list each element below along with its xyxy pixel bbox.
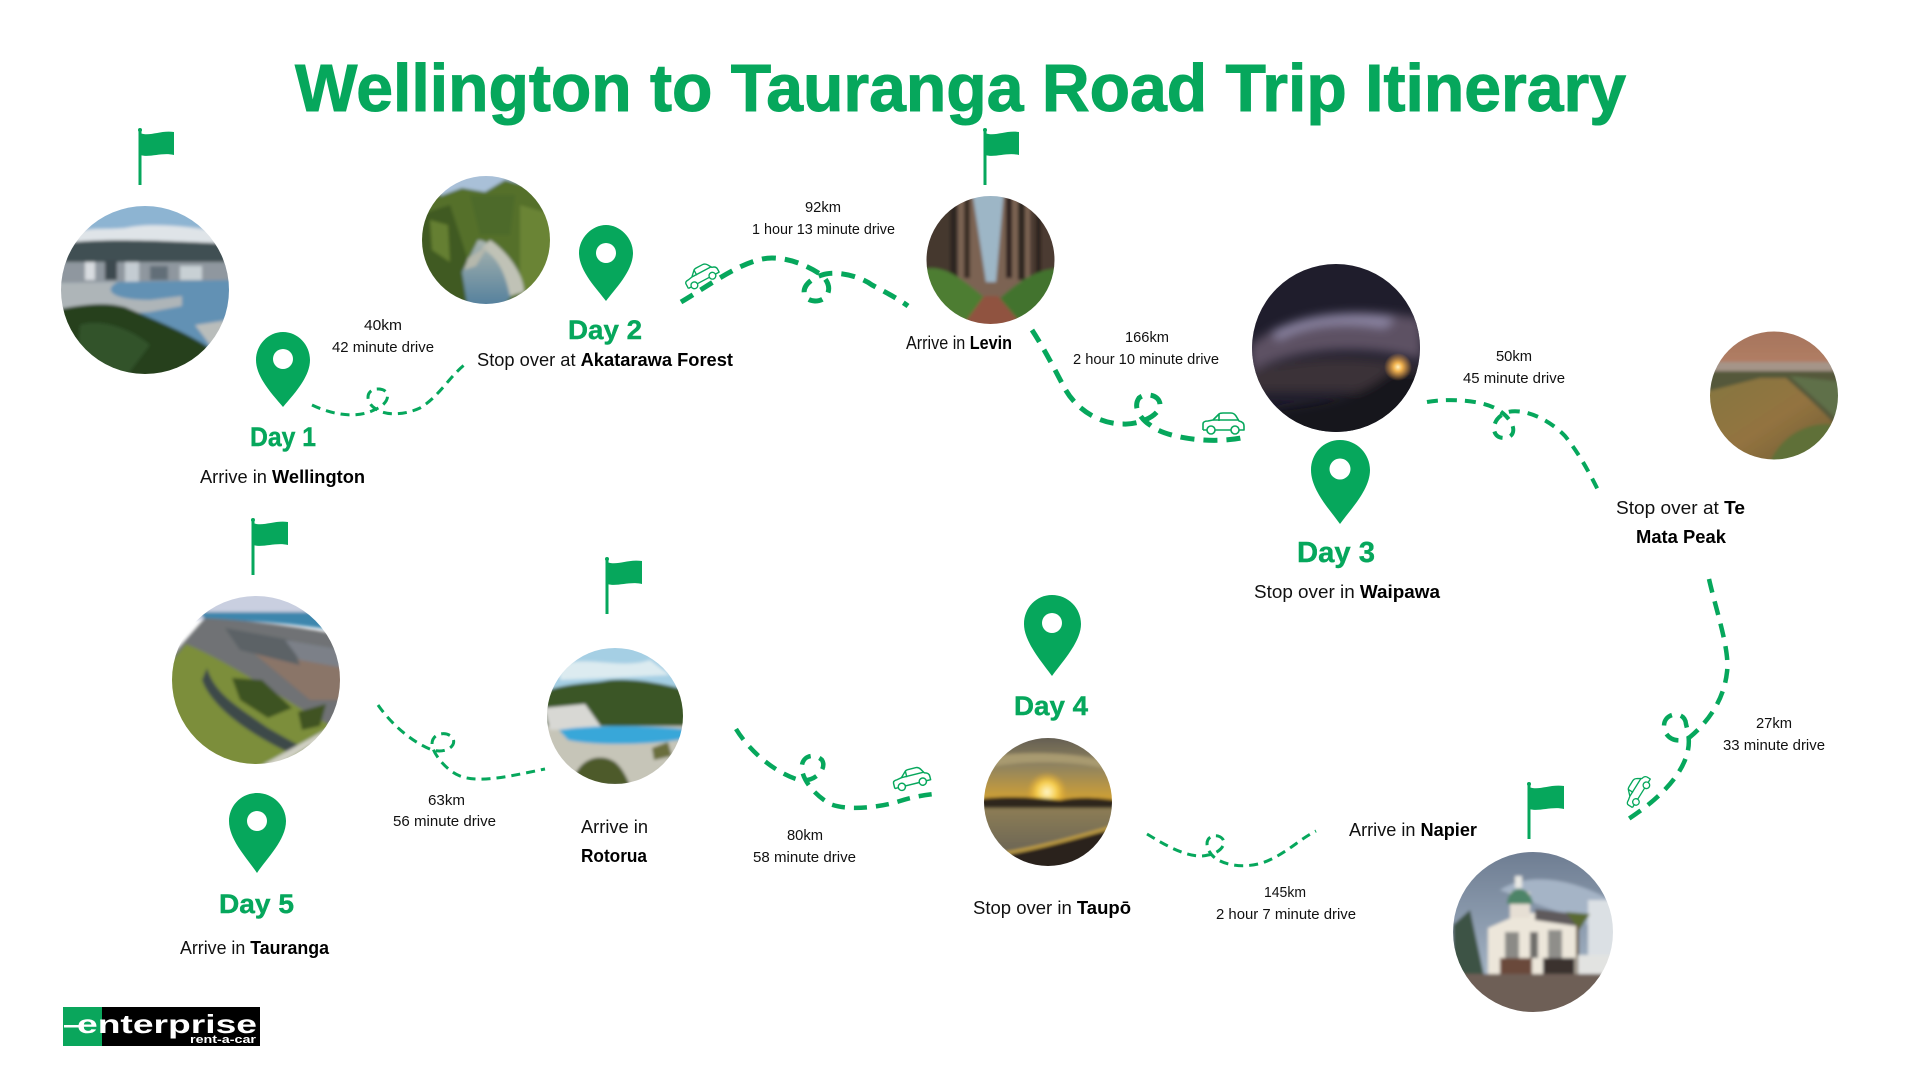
stop label: Waipawa: Stop over in Waipawa: [1254, 582, 1441, 602]
flag: Levin: [983, 128, 1019, 185]
photo: Taupo sunset: [984, 738, 1112, 866]
route: Taupo to Napier: [1147, 831, 1316, 866]
distance: 63km: 63km: [428, 792, 465, 809]
title: Wellington to Tauranga Road Trip Itinerary: [295, 51, 1626, 126]
duration: 42 minute drive: 42 minute drive: [332, 339, 434, 356]
stop label: Arrive in Rotorua: [581, 817, 648, 866]
stop label: Arrive in Tauranga: Arrive in Tauranga: [180, 938, 330, 958]
duration: 2 hour 7 minute drive: 2 hour 7 minute drive: [1216, 906, 1356, 923]
route: Te Mata Peak to Napier: [1627, 579, 1727, 820]
heading: Day 1: Day 1: [250, 422, 316, 452]
route: Rotorua to Taupo: [736, 729, 934, 808]
stop label: Arrive in Wellington: Arrive in Wellington: [200, 467, 365, 487]
photo: Waipawa night sky: [1250, 262, 1422, 440]
route: Tauranga to Rotorua: [378, 705, 545, 779]
stop label: Arrive in Levin: Arrive in Levin: [906, 333, 1012, 353]
stop label: Taupo: Stop over in Taupō: [973, 898, 1131, 918]
icon: car on route to Napier: [1621, 772, 1653, 809]
stop label: Akatarawa Forest: Stop over at Akatarawa Forest: [477, 350, 733, 370]
duration: 33 minute drive: 33 minute drive: [1723, 737, 1825, 754]
map pin: Day 1: [256, 332, 310, 407]
distance: 50km: 50km: [1496, 348, 1532, 365]
heading: Day 3: Day 3: [1297, 537, 1375, 569]
photo: Tauranga aerial: [172, 596, 340, 764]
distance: 166km: 166km: [1125, 329, 1169, 346]
map pin: Day 4: [1024, 595, 1081, 676]
route: Levin to Waipawa: [1032, 330, 1241, 440]
icon: car on route to Waipawa: [1203, 413, 1244, 434]
logo: enterprise rent-a-car: enterprise: [77, 1009, 257, 1039]
map pin: Day 5: [229, 793, 286, 873]
map pin: Day 2: [579, 225, 633, 301]
distance: 145km: 145km: [1264, 884, 1306, 901]
heading: Day 5: Day 5: [219, 889, 294, 919]
route: Akatarawa to Levin: [681, 258, 908, 306]
duration: 45 minute drive: 45 minute drive: [1463, 370, 1565, 387]
stop label: Arrive in Rotorua: Rotorua: [581, 846, 648, 866]
logo: enterprise rent-a-car: rent-a-car: [190, 1034, 257, 1046]
duration: 1 hour 13 minute drive: 1 hour 13 minute drive: [752, 221, 895, 238]
route: Wellington to Akatarawa: [312, 362, 468, 415]
photo: Wellington harbour: [61, 206, 229, 374]
icon: car on route to Taupo: [891, 765, 932, 792]
duration: 58 minute drive: 58 minute drive: [753, 849, 856, 866]
icon: car on route to Levin: [682, 259, 721, 291]
stop label: Arrive in Napier: Arrive in Napier: [1349, 820, 1477, 840]
flag: Tauranga: [251, 518, 288, 575]
route: Waipawa to Te Mata Peak: [1427, 400, 1599, 492]
distance: 27km: 27km: [1756, 715, 1792, 732]
stop label: Stop over at Te Mata Peak: Mata Peak: [1636, 527, 1727, 547]
photo: Rotorua geothermal pool: [547, 648, 683, 784]
flag: Wellington: [138, 128, 174, 185]
photo: Akatarawa Forest: [422, 176, 550, 304]
duration: 2 hour 10 minute drive: 2 hour 10 minute drive: [1073, 351, 1219, 368]
stop label: Arrive in Rotorua: Arrive in: [581, 817, 648, 837]
map pin: Day 3: [1311, 440, 1370, 524]
logo: enterprise rent-a-car: [63, 1007, 260, 1046]
photo: Napier art deco building: [1453, 852, 1613, 1012]
stop label: Stop over at Te Mata Peak: Stop over at Te: [1616, 498, 1745, 518]
heading: Day 2: Day 2: [568, 315, 642, 345]
photo: Te Mata Peak: [1710, 332, 1838, 460]
flag: Napier: [1527, 782, 1564, 839]
photo: Levin forest: [926, 196, 1054, 324]
stop label: Stop over at Te Mata Peak: [1616, 498, 1745, 547]
heading: Day 4: Day 4: [1014, 691, 1088, 721]
distance: 80km: 80km: [787, 827, 823, 844]
distance: 40km: 40km: [364, 317, 402, 334]
flag: Rotorua: [605, 557, 642, 614]
duration: 56 minute drive: 56 minute drive: [393, 813, 496, 830]
distance: 92km: 92km: [805, 199, 841, 216]
